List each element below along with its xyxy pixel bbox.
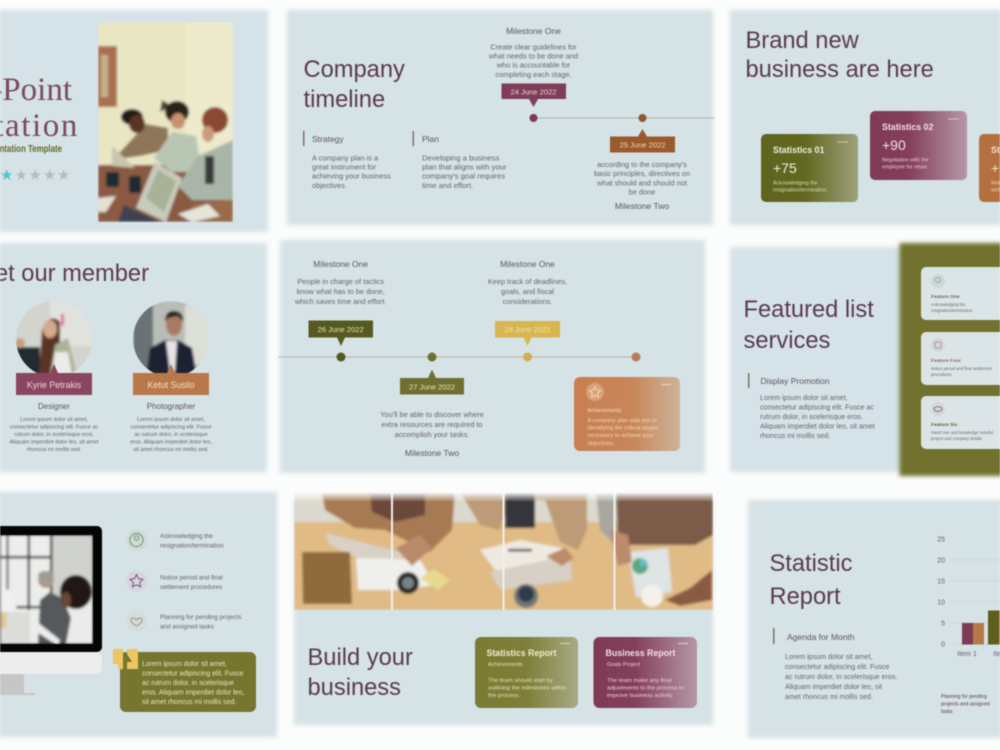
card: statistics 02 xyxy=(870,111,967,180)
portrait: woman xyxy=(15,301,92,377)
member: Kyrie Petrakis: Lorem ipsum dolor sit amet, xyxy=(20,417,88,423)
panel: company timeline xyxy=(287,10,715,225)
milestone: 27 June: accomplish your tasks. xyxy=(395,430,469,439)
card: business report: Business Report xyxy=(606,648,675,658)
milestone two: according to the company's xyxy=(597,160,687,169)
card: statistics report: the process. xyxy=(488,693,520,699)
milestone: 28 June: considerations. xyxy=(503,297,552,306)
screen photo: colleagues at a window xyxy=(0,535,93,646)
checklist item: notice period: settlement procedures xyxy=(160,584,222,591)
milestone: 26 June: which saves time and effort. xyxy=(294,297,386,306)
card: business report: Goals Project xyxy=(607,662,640,668)
display promotion text: rhoncus mi mollis sed. xyxy=(760,432,830,440)
bar chart: Item 1 xyxy=(957,651,977,658)
card: achievements: A company plan aids you in xyxy=(588,418,657,424)
milestone: 27 June: extra resources are required to xyxy=(381,420,483,429)
milestone one: completing each stage. xyxy=(495,70,572,79)
milestone one: Milestone One xyxy=(506,26,561,36)
milestone: 26 June xyxy=(294,259,386,346)
card: business report xyxy=(594,637,697,708)
star rating: ★ xyxy=(43,166,56,184)
panel: featured list services xyxy=(730,243,1000,476)
card: statistics 03: + xyxy=(991,160,999,176)
milestone: 26 June: know what has to be done, xyxy=(297,287,385,296)
checklist item: planning: Planning for pending projects xyxy=(160,614,242,621)
member: Ketut Susilo xyxy=(130,301,212,453)
checklist item: planning: and assigned tasks xyxy=(160,624,214,630)
heading: Statistic xyxy=(770,551,853,577)
member: Kyrie Petrakis: Kyrie Petrakis xyxy=(27,380,82,390)
heading: Company xyxy=(304,57,405,83)
card: statistics 01 xyxy=(761,134,858,202)
member: Kyrie Petrakis: Aliquam imperdiet dolor leo, sit amet xyxy=(10,440,99,446)
bar chart: 25 xyxy=(937,536,945,544)
star rating: ★ xyxy=(28,166,42,184)
photo strip: team at a wooden table xyxy=(294,492,713,610)
card: statistics 02: employee for retain xyxy=(882,164,927,170)
milestone: 27 June xyxy=(380,370,484,458)
card: statistics report: Statistics Report xyxy=(486,648,556,658)
star rating: ★ xyxy=(14,166,28,184)
display promotion text: Display Promotion xyxy=(760,376,830,386)
milestone: 28 June: Milestone One xyxy=(500,259,555,269)
panel: meet our member xyxy=(0,243,267,472)
checklist item: notice period xyxy=(126,570,223,592)
chart caption: tasks xyxy=(941,709,953,715)
quote note box xyxy=(113,649,256,712)
checklist item: notice period: Notice period and final xyxy=(160,574,223,582)
card: statistics 03 xyxy=(979,134,1000,202)
quote note box: ac rutrum dolor, in scelerisque xyxy=(142,680,234,687)
panel: extended timeline xyxy=(278,240,705,473)
agenda text: Agenda for Month xyxy=(787,632,855,642)
bar chart: 15 xyxy=(937,578,945,586)
heading: Build your xyxy=(308,645,413,671)
display promotion text xyxy=(748,373,875,440)
timeline axis xyxy=(530,114,715,122)
quote note box: Lorem ipsum dolor sit amet, xyxy=(142,661,227,668)
card: statistics 02: Negotiation with the xyxy=(882,158,929,164)
milestone: 27 June: You'll be able to discover where xyxy=(380,410,484,419)
bar chart: 5 xyxy=(941,620,945,628)
strategy column: great instrument for xyxy=(312,162,377,172)
heading: services xyxy=(744,328,830,354)
heading: Featured list xyxy=(744,297,874,323)
bar chart xyxy=(937,536,1000,658)
strategy column xyxy=(303,131,391,190)
milestone one: who is accountable for xyxy=(496,60,571,70)
card: business report: adjustments to the process to xyxy=(607,686,685,692)
agenda text: consectetur adipiscing elit. Fusce xyxy=(785,663,890,671)
card: statistics 02: +90 xyxy=(882,137,906,153)
member: Ketut Susilo: Ketut Susilo xyxy=(148,380,195,390)
card: achievements: identifying the critical stages xyxy=(588,426,659,432)
milestone: 27 June: Milestone Two xyxy=(405,448,459,458)
feature card: four: Feature Four xyxy=(931,358,961,364)
milestone: 28 June: 28 June 2022 xyxy=(504,325,551,334)
icon: quotation mark xyxy=(113,649,138,669)
card: statistics report xyxy=(475,637,578,708)
photo: team around a laptop xyxy=(98,22,233,222)
agenda text: ac rutrum dolor, in scelerisque eros. xyxy=(785,673,897,681)
strategy column: achieving your business xyxy=(312,172,391,180)
member: Kyrie Petrakis xyxy=(10,301,99,453)
feature card: four: procedures xyxy=(931,372,951,377)
card: business report: The team make any final xyxy=(607,678,672,684)
star rating: ★ xyxy=(57,166,70,184)
milestone two: 25 June 2022 xyxy=(619,140,666,150)
milestone: 28 June: Keep track of deadlines, xyxy=(488,277,567,286)
display promotion text: consectetur adipiscing elit. Fusce ac xyxy=(760,404,874,412)
icon: star xyxy=(586,383,604,401)
monitor mockup xyxy=(0,526,102,695)
display promotion text: rutrum dolor, in scelerisque eros. xyxy=(760,413,863,421)
agenda text: amet rhoncus mi mollis sed. xyxy=(785,693,873,701)
card: business report: improve business activity. xyxy=(607,693,674,699)
member: Ketut Susilo: consectetur adipiscing elit. Fusce xyxy=(130,424,212,430)
milestone two: Milestone Two xyxy=(615,201,669,211)
plan column: time and effort. xyxy=(422,181,473,190)
strategy column: objectives. xyxy=(312,181,347,190)
feature card: six: project and company details xyxy=(931,436,982,441)
checklist item: planning xyxy=(126,610,242,632)
agenda text: Aliquam imperdiet dolor leo, sit xyxy=(785,683,882,691)
card: statistics 01: Acknowledging the xyxy=(773,180,818,186)
quote note box: eros. Aliquam imperdiet dolor leo, xyxy=(142,690,244,696)
feature card: six xyxy=(921,396,1000,449)
milestone one: 24 June 2022 xyxy=(510,88,557,96)
plan column: Developing a business xyxy=(422,154,500,162)
milestone one: what needs to be done and xyxy=(488,52,578,60)
checklist item: acknowledging: resignation/termination xyxy=(160,542,224,550)
milestone: 26 June: Milestone One xyxy=(313,259,368,269)
card: statistics report: outlining the milestones within xyxy=(488,686,566,692)
member: Kyrie Petrakis: rhoncus mi mollis sed. xyxy=(27,447,82,453)
star rating: ★ xyxy=(0,166,13,184)
feature card: one: resignation/termination xyxy=(931,308,973,313)
milestone two: what should and should not xyxy=(596,178,687,188)
milestone: 26 June: People in charge of tactics xyxy=(297,277,384,286)
heading: Report xyxy=(770,584,841,610)
card: statistics 01: resignation/termination xyxy=(773,188,827,194)
feature card: six: Hand over and knowledge transfer xyxy=(931,430,994,435)
strategy column: A company plan is a xyxy=(312,154,379,162)
chart caption: Planning for pending xyxy=(941,694,987,700)
milestone: 28 June: goals, and fiscal xyxy=(501,287,554,296)
panel: build your business xyxy=(294,492,713,725)
strategy column: Strategy xyxy=(312,134,344,144)
panel: title slide xyxy=(0,10,268,232)
milestone: 27 June: 27 June 2022 xyxy=(409,382,455,392)
agenda text: Lorem ipsum dolor sit amet, xyxy=(785,653,873,661)
timeline axis xyxy=(278,352,640,362)
card: statistics report: The team should start by xyxy=(488,678,553,684)
bar chart: 20 xyxy=(937,558,945,564)
milestone one xyxy=(488,26,578,107)
card: statistics 01: Statistics 01 xyxy=(773,145,824,155)
feature card: one xyxy=(921,267,1000,320)
heading: business xyxy=(308,675,401,701)
display promotion text: Aliquam imperdiet dolor leo, sit amet xyxy=(760,422,875,430)
member: Kyrie Petrakis: consectetur adipiscing elit. Fusce ac xyxy=(10,424,98,430)
chart caption: projects and assigned xyxy=(941,702,990,708)
plan column xyxy=(412,131,507,190)
feature card: six: Feature Six xyxy=(931,422,958,428)
milestone one: Create clear guidelines for xyxy=(490,42,577,52)
card: achievements: objectives. xyxy=(588,441,615,447)
panel: monitor and checklist xyxy=(0,492,277,737)
feature card: one: Acknowledging the xyxy=(931,302,966,307)
card: achievements: necessary to achieve your xyxy=(588,433,654,439)
milestone two: be done xyxy=(629,188,655,196)
milestone two xyxy=(594,129,690,211)
milestone: 26 June: 26 June 2022 xyxy=(318,325,364,334)
heading: timeline xyxy=(304,87,385,113)
feature card: four: Notice period and final settlement xyxy=(931,366,993,371)
plan column: Plan xyxy=(422,134,439,144)
card: statistics 01: +75 xyxy=(773,160,797,176)
member: Ketut Susilo: Photographer xyxy=(147,402,196,411)
olive feature column xyxy=(900,243,1000,476)
member: Ketut Susilo: Lorem ipsum dolor sit amet, xyxy=(137,417,205,423)
bar chart: 10 xyxy=(937,600,945,606)
quote note box: consectetur adipiscing elit. Fusce xyxy=(142,670,244,678)
feature card: four xyxy=(921,332,1000,385)
member: Ketut Susilo: ac rutrum dolor, in scelerisque xyxy=(134,432,208,438)
panel: brand new business xyxy=(730,10,1000,225)
card: statistics report: Achievements xyxy=(488,662,523,668)
member: Kyrie Petrakis: rutrum dolor, in scelerisque eros. xyxy=(14,432,94,438)
portrait: man xyxy=(133,301,209,377)
checklist item: acknowledging xyxy=(126,530,224,550)
plan column: company's goal requires xyxy=(422,172,505,180)
quote note box: sit amet rhoncus mi mollis sed. xyxy=(142,699,236,706)
card: achievements xyxy=(574,377,680,451)
checklist item: acknowledging: Acknowledging the xyxy=(160,533,213,540)
heading: Brand new xyxy=(746,28,860,54)
bar chart: 0 xyxy=(941,642,945,648)
display promotion text: Lorem ipsum dolor sit amet, xyxy=(760,394,848,402)
milestone two: basic principles, directives on xyxy=(594,169,690,178)
heading: business are here xyxy=(746,57,934,83)
card: achievements: Achievements xyxy=(588,408,622,414)
card: statistics 02: Statistics 02 xyxy=(882,122,933,132)
milestone: 28 June xyxy=(488,259,567,346)
member: Ketut Susilo: eros. Aliquam imperdiet dolor leo, xyxy=(130,440,212,446)
panel: statistic report xyxy=(748,500,1000,738)
feature card: one: Feature One xyxy=(931,294,960,300)
agenda text xyxy=(773,628,897,701)
member: Ketut Susilo: sit amet rhoncus mi mollis sed. xyxy=(133,447,209,453)
plan column: plan that aligns with your xyxy=(422,162,507,172)
member: Kyrie Petrakis: Designer xyxy=(38,402,70,411)
